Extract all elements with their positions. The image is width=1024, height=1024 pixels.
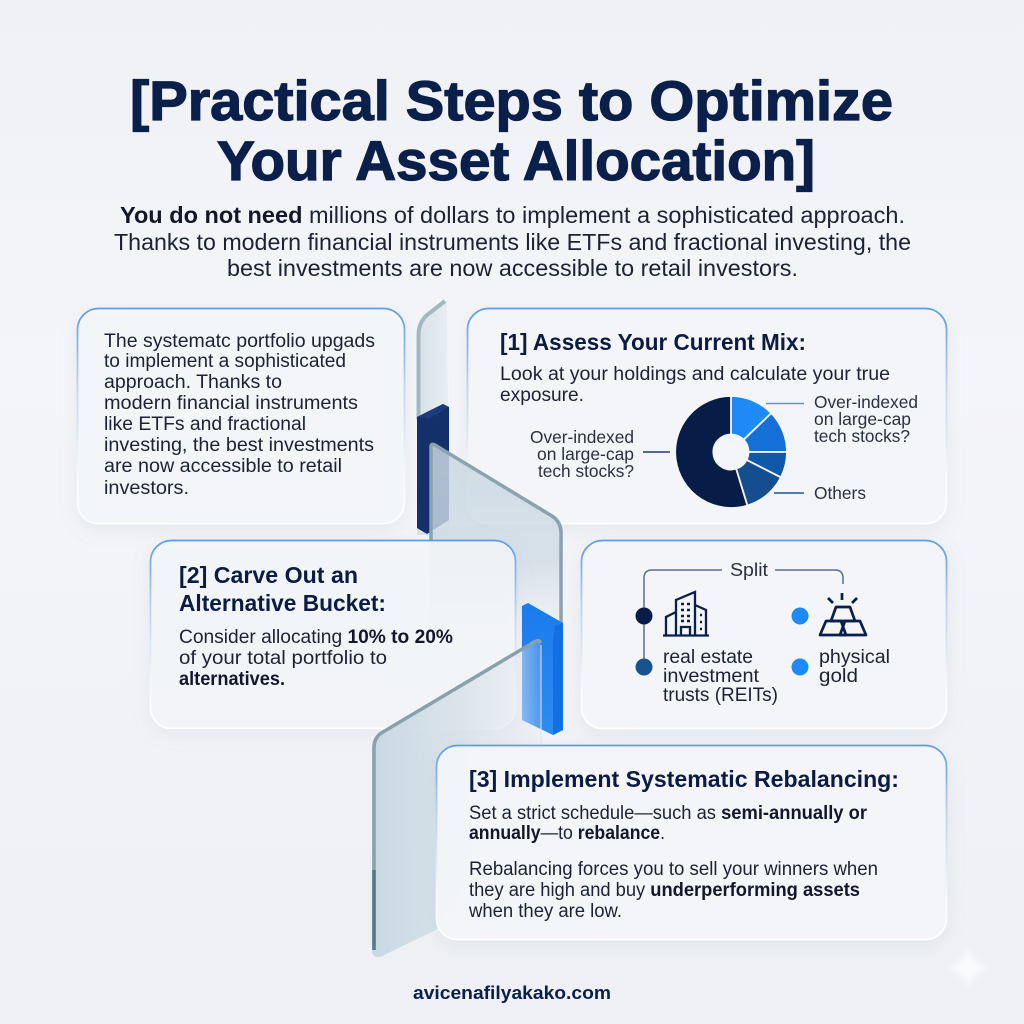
chart label: left: Over-indexed bbox=[530, 427, 634, 447]
step 2 body: Consider allocating 10% to 20% bbox=[179, 627, 453, 648]
step 2 heading bbox=[179, 562, 386, 616]
intro card text: investing, the best investments bbox=[104, 435, 374, 456]
step 3 body: Set a strict schedule—such as semi-annually or bbox=[469, 803, 867, 824]
glass panel: top divider bbox=[417, 300, 449, 535]
intro card text: are now accessible to retail bbox=[104, 456, 342, 477]
split connector bbox=[644, 570, 843, 667]
title: [Practical Steps to Optimize bbox=[130, 69, 893, 132]
panel: systematic portfolio intro bbox=[78, 308, 404, 524]
step 3 body: when they are low. bbox=[468, 901, 622, 922]
step 1 body: exposure. bbox=[500, 385, 584, 406]
chart label: left: on large-cap bbox=[537, 444, 634, 464]
chart label: top right: on large-cap bbox=[814, 409, 911, 429]
footer url: avicenafilyakako.com bbox=[413, 982, 611, 1003]
step 1 body: Look at your holdings and calculate your true bbox=[500, 364, 890, 385]
step 3 heading: [3] Implement Systematic Rebalancing: bbox=[469, 766, 899, 792]
step 3 body bbox=[468, 803, 878, 922]
intro paragraph bbox=[114, 202, 911, 281]
icon: office buildings bbox=[663, 592, 709, 636]
panel: split into reits and gold bbox=[582, 540, 946, 728]
title: Your Asset Allocation] bbox=[217, 129, 815, 192]
glass panel: middle divider bbox=[430, 443, 563, 640]
intro card text: investors. bbox=[104, 478, 189, 499]
panel: step 3 systematic rebalancing bbox=[436, 746, 946, 940]
intro paragraph: You do not need millions of dollars to implement a sophisticated approach. bbox=[120, 202, 905, 228]
chart label: others: Others bbox=[814, 483, 866, 503]
step 2 body: of your total portfolio to bbox=[179, 648, 387, 669]
step 3 body: annually—to rebalance. bbox=[469, 823, 665, 844]
reits label bbox=[663, 647, 778, 706]
panel: step 1 assess your current mix bbox=[468, 308, 946, 524]
glass panel: lower divider bbox=[372, 640, 541, 957]
panel: step 2 carve out an alternative bucket bbox=[150, 540, 516, 728]
intro card text: approach. Thanks to bbox=[104, 372, 282, 393]
step 1 heading: [1] Assess Your Current Mix: bbox=[500, 329, 806, 355]
step 3 body: Rebalancing forces you to sell your winners when bbox=[469, 859, 878, 880]
chart label: left bbox=[530, 427, 634, 481]
chart label: left: tech stocks? bbox=[538, 461, 634, 481]
intro paragraph: best investments are now accessible to retail investors. bbox=[227, 255, 798, 281]
donut chart bbox=[675, 396, 787, 508]
split label: Split bbox=[730, 559, 768, 580]
bright blue bar bbox=[522, 603, 563, 735]
step 2 body bbox=[179, 627, 453, 690]
step 2 body: alternatives. bbox=[179, 669, 285, 690]
gold label: physical bbox=[819, 647, 890, 668]
dots bbox=[636, 608, 808, 676]
intro paragraph: Thanks to modern financial instruments like ETFs and fractional investing, the bbox=[114, 229, 911, 255]
intro card text: The systematc portfolio upgads bbox=[104, 331, 375, 352]
step 2 heading: Alternative Bucket: bbox=[179, 590, 386, 616]
dark blue bar bbox=[417, 404, 449, 534]
intro card text: modern financial instruments bbox=[104, 393, 358, 414]
intro card text: to implement a sophisticated bbox=[104, 351, 346, 372]
step 2 heading: [2] Carve Out an bbox=[179, 562, 358, 588]
gold label bbox=[819, 647, 890, 687]
step 1 body bbox=[500, 364, 890, 406]
intro card text bbox=[104, 331, 375, 499]
chart label: top right: tech stocks? bbox=[814, 426, 910, 446]
chart label: top right: Over-indexed bbox=[814, 392, 918, 412]
title bbox=[130, 69, 893, 192]
intro card text: like ETFs and fractional bbox=[104, 414, 306, 435]
chart label: top right bbox=[814, 392, 918, 446]
reits label: real estate bbox=[663, 647, 753, 668]
chart leader lines bbox=[643, 404, 804, 493]
icon: sparkle bbox=[946, 946, 990, 990]
icon: gold bars bbox=[820, 593, 866, 635]
reits label: investment bbox=[663, 666, 760, 687]
reits label: trusts (REITs) bbox=[663, 685, 778, 706]
gold label: gold bbox=[819, 666, 858, 687]
step 3 body: they are high and buy underperforming assets bbox=[469, 880, 860, 901]
